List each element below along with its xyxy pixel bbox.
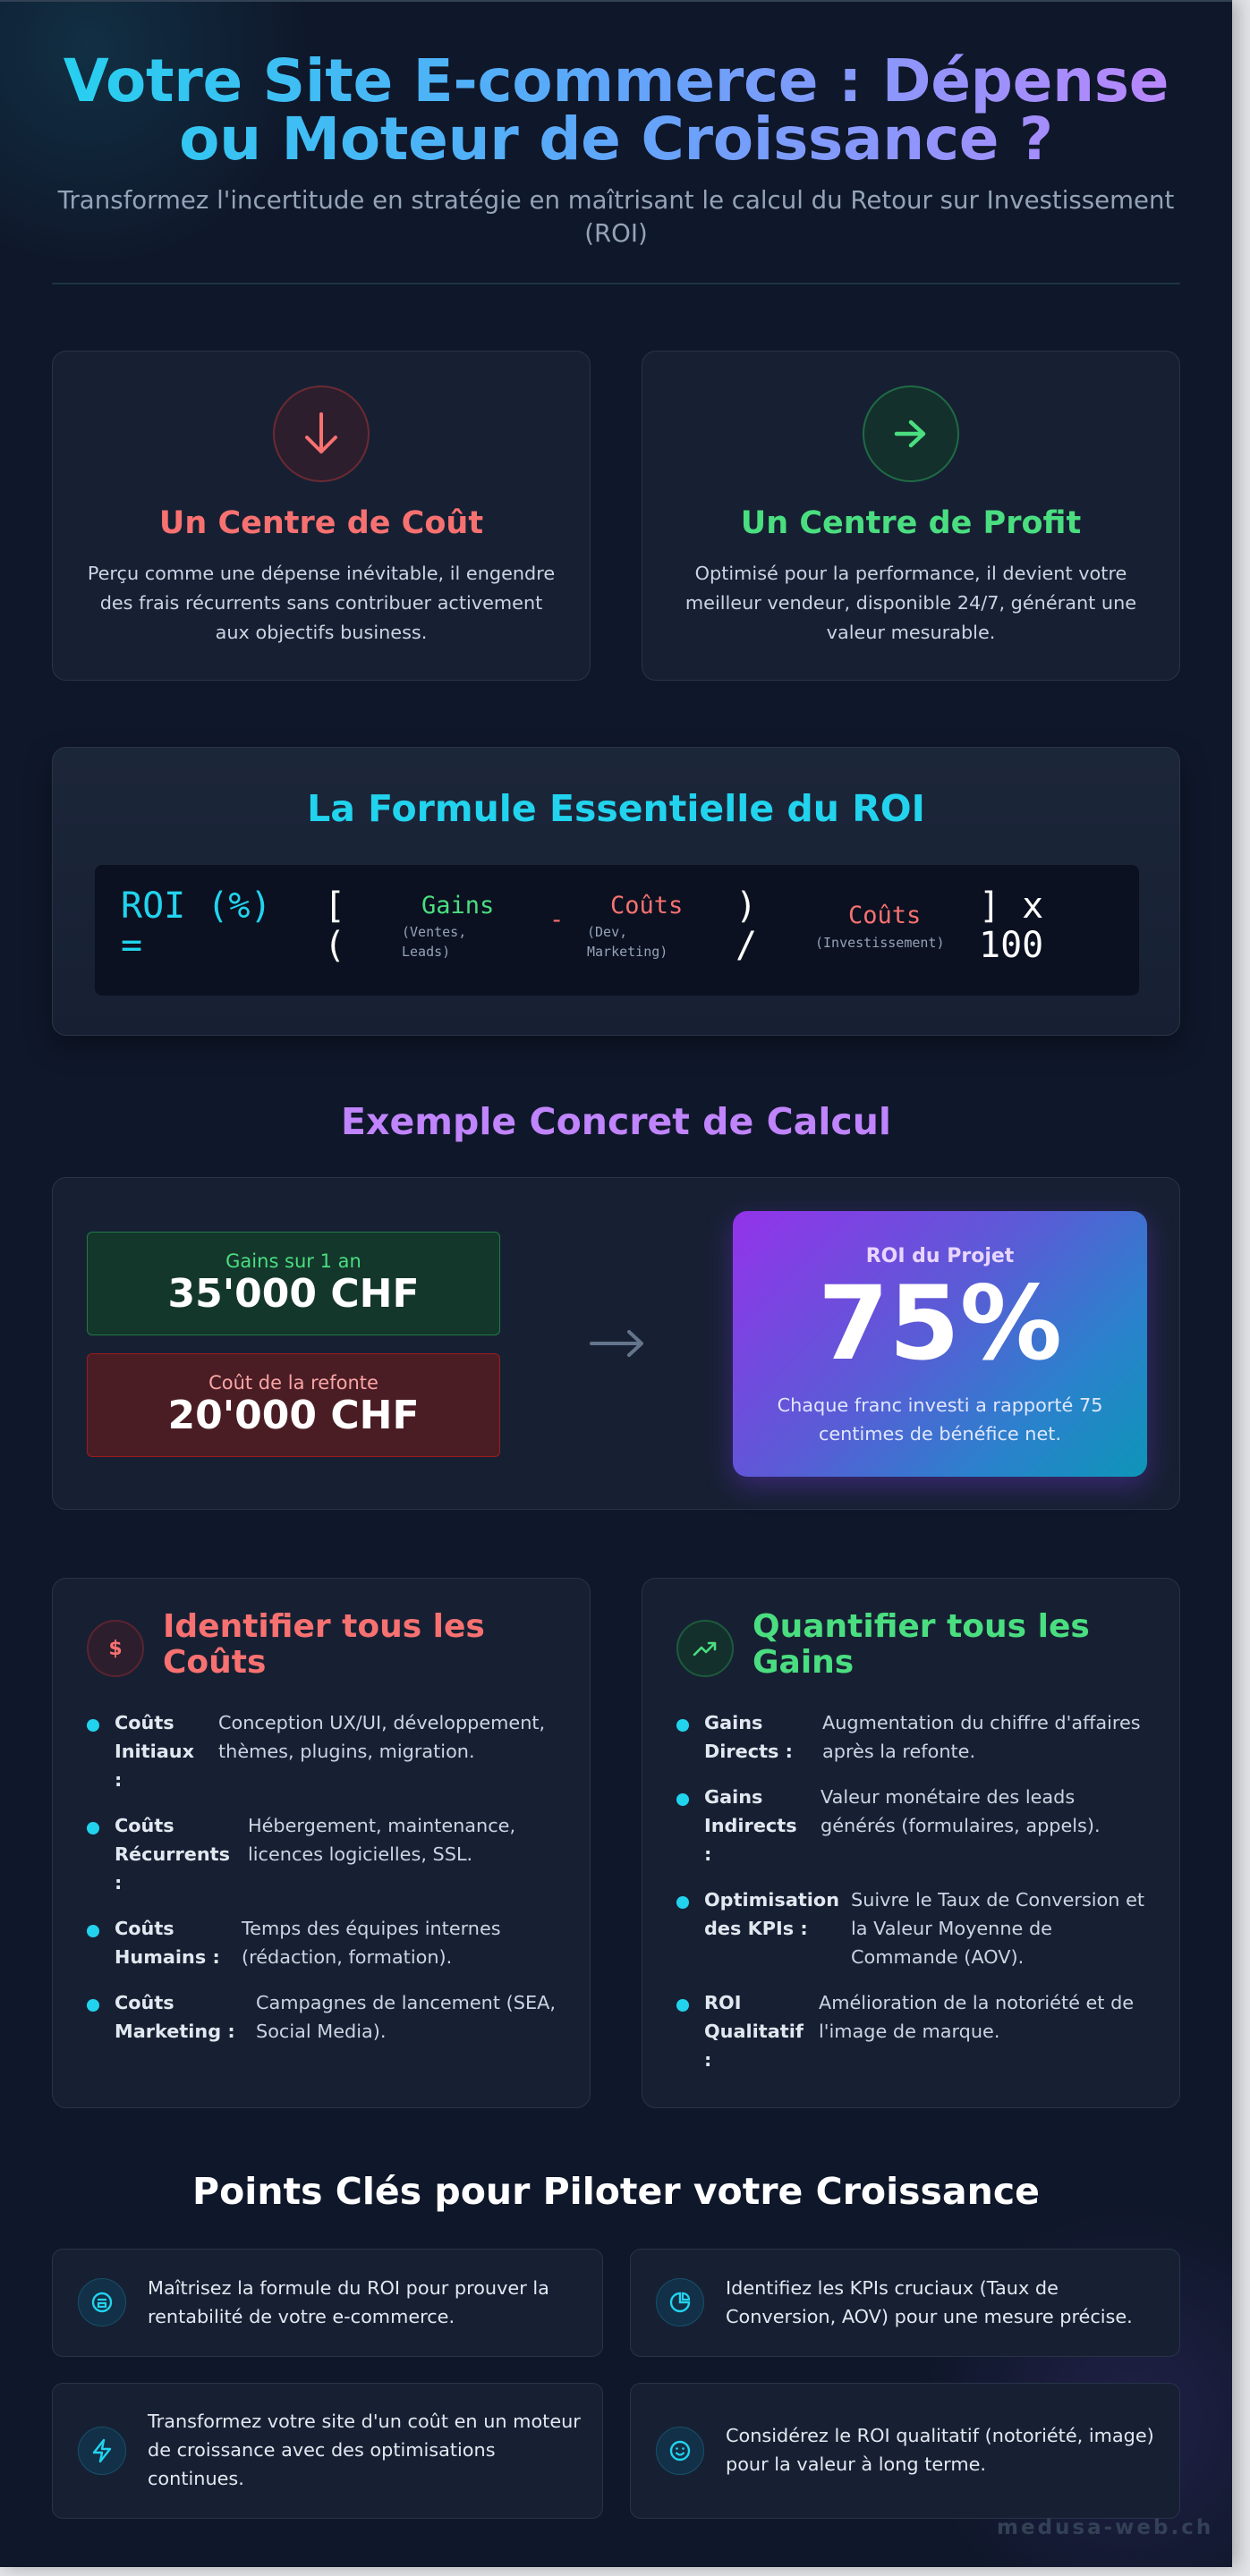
panel: example (52, 1177, 1180, 1510)
heading: La Formule Essentielle du ROI (307, 787, 925, 830)
subtitle: Transformez l'incertitude en stratégie en maîtrisant le calcul du Retour sur Investissement (ROI) (58, 185, 1174, 248)
item: Temps des équipes internes (rédaction, formation). (242, 1918, 501, 1968)
panel: formula (52, 747, 1180, 1036)
key point 2: Identifiez les KPIs cruciaux (Taux de Conversion, AOV) pour une mesure précise. (726, 2277, 1133, 2327)
item: la Valeur Moyenne de (851, 1918, 1052, 1939)
cost box: 20'000 CHF (167, 1393, 420, 1438)
gains box: Gains sur 1 an (225, 1250, 361, 1272)
ROI result: 75% (818, 1264, 1062, 1383)
formula box: ( (324, 925, 345, 966)
icon: arrow right (863, 386, 959, 482)
item: : (704, 1843, 711, 1865)
item: générés (formulaires, appels). (821, 1815, 1101, 1836)
title: Votre Site E-commerce : Dépense (64, 47, 1169, 115)
item: Indirects (704, 1815, 797, 1836)
icon: trending up (676, 1620, 734, 1677)
item: Marketing : (115, 2021, 235, 2042)
formula box: / (736, 925, 757, 966)
heading: example: Exemple Concret de Calcul (341, 1100, 891, 1143)
formula box: [ (324, 886, 345, 927)
item: : (115, 1769, 122, 1791)
heading: Un Centre de Coût (159, 505, 483, 541)
title: ou Moteur de Croissance ? (179, 105, 1053, 174)
heading: Quantifier tous les (753, 1608, 1090, 1645)
item: Coûts (115, 1992, 174, 2013)
item: Campagnes de lancement (SEA, Social Media). (256, 1992, 556, 2042)
item: Conception UX/UI, développement, thèmes, plugins, migration. (218, 1712, 545, 1762)
item: Commande (AOV). (851, 1946, 1024, 1968)
item (87, 1918, 501, 1968)
formula box: Coûts (610, 892, 683, 919)
icon: dollar: $ (108, 1637, 123, 1660)
cost box: Coût de la refonte (208, 1372, 378, 1394)
icon (656, 2427, 704, 2475)
item: Coûts (115, 1712, 174, 1733)
item: Hébergement, maintenance, licences logicielles, SSL. (248, 1815, 515, 1865)
formula box: Coûts (848, 902, 921, 929)
arrow (590, 1329, 644, 1358)
panel: gains (642, 1578, 1180, 2108)
panel: cost center (52, 351, 591, 681)
formula box: - (549, 906, 564, 934)
formula box: (Investissement) (815, 935, 945, 951)
item (676, 1992, 1134, 2071)
item: Coûts (115, 1918, 174, 1939)
formula box (95, 865, 1139, 996)
heading: Coûts (163, 1644, 266, 1681)
heading: key points: Points Clés pour Piloter votre Croissance (192, 2170, 1040, 2213)
heading: Un Centre de Profit (741, 505, 1081, 541)
item: Humains : (115, 1946, 220, 1968)
formula box: ) (736, 886, 757, 927)
formula box: 100 (979, 925, 1043, 966)
key point 1 (52, 2249, 603, 2357)
text: Optimisé pour la performance, il devient votre meilleur vendeur, disponible 24/7, générant une valeur mesurable. (685, 563, 1136, 643)
title (18, 52, 1214, 168)
item: Amélioration de la notoriété et de l'image de marque. (819, 1992, 1134, 2042)
icon (78, 2278, 126, 2326)
item (676, 1889, 1144, 1968)
item: Qualitatif (704, 2021, 804, 2042)
icon (656, 2278, 704, 2326)
formula box: = (121, 925, 142, 966)
item: Valeur monétaire des leads (821, 1786, 1075, 1808)
key point 3: Transformez votre site d'un coût en un moteur de croissance avec des optimisations continues. (148, 2411, 581, 2489)
gains box: 35'000 CHF (167, 1271, 420, 1317)
panel: profit center (642, 351, 1180, 681)
heading: Identifier tous les (163, 1608, 485, 1645)
formula box: ROI (%) (121, 886, 272, 927)
ROI result: centimes de bénéfice net. (819, 1423, 1061, 1445)
item: Initiaux (115, 1741, 194, 1762)
gains box (87, 1232, 500, 1335)
icon (78, 2427, 126, 2475)
key point 2 (630, 2249, 1180, 2357)
icon: dollar (87, 1620, 144, 1677)
item: : (115, 1872, 122, 1894)
item (676, 1786, 1101, 1865)
item: ROI (704, 1992, 741, 2013)
text: Perçu comme une dépense inévitable, il engendre des frais récurrents sans contribuer activement aux objectifs business. (88, 563, 555, 643)
item: Gains (704, 1786, 762, 1808)
formula box: ] x (979, 886, 1043, 927)
cost box (87, 1353, 500, 1457)
item (87, 1712, 545, 1791)
item: Augmentation du chiffre d'affaires après la refonte. (822, 1712, 1141, 1762)
panel: costs (52, 1578, 591, 2108)
item (676, 1712, 1141, 1762)
item: Optimisation (704, 1889, 839, 1911)
formula box: Leads) (402, 944, 450, 960)
item (87, 1815, 515, 1894)
item: : (704, 2049, 711, 2071)
item: Directs : (704, 1741, 793, 1762)
item: Récurrents (115, 1843, 230, 1865)
item (87, 1992, 556, 2042)
ROI result (733, 1211, 1147, 1477)
ROI result: ROI du Projet (866, 1245, 1014, 1267)
key point 1: Maîtrisez la formule du ROI pour prouver la rentabilité de votre e-commerce. (148, 2277, 549, 2327)
item: Gains (704, 1712, 762, 1733)
item: Coûts (115, 1815, 174, 1836)
item: des KPIs : (704, 1918, 808, 1939)
formula box: (Ventes, (402, 924, 466, 940)
formula box: Marketing) (587, 944, 668, 960)
heading (753, 1608, 1090, 1681)
heading: Gains (753, 1644, 854, 1681)
ROI result: Chaque franc investi a rapporté 75 (778, 1394, 1102, 1416)
key point 4 (630, 2383, 1180, 2519)
heading (163, 1608, 485, 1681)
item: Suivre le Taux de Conversion et (851, 1889, 1144, 1911)
watermark: medusa-web.ch (997, 2516, 1213, 2539)
icon: arrow down (273, 386, 370, 482)
formula box: Gains (421, 892, 494, 919)
formula box: (Dev, (587, 924, 627, 940)
key point 3 (52, 2383, 603, 2519)
key point 4: Considérez le ROI qualitatif (notoriété, image) pour la valeur à long terme. (726, 2425, 1154, 2475)
